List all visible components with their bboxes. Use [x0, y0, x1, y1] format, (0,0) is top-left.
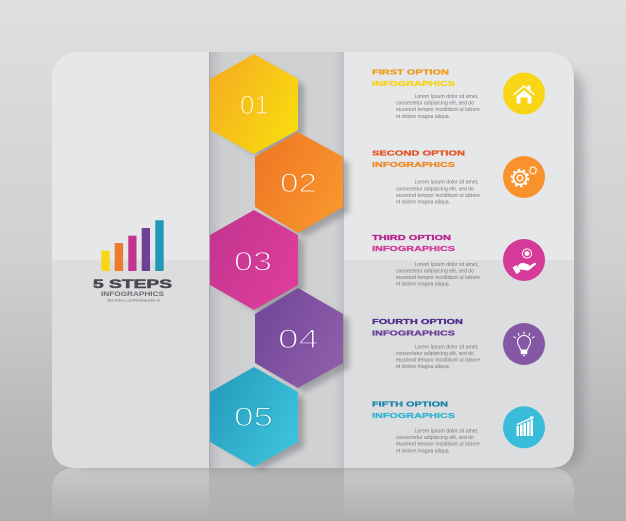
logo: heading: VECTOR ILLUSTRATION EPS 10	[107, 298, 161, 302]
option 3 text: eiusmod tempor incididunt ut labore	[396, 275, 480, 281]
option 3 text: et dolore magna aliqua.	[396, 282, 450, 288]
option 2 text: INFOGRAPHICS	[372, 160, 455, 169]
option 5 text: consectetur adipisicing elit, sed do	[396, 435, 474, 441]
option 3 text: THIRD OPTION	[372, 233, 451, 242]
option 3 text: INFOGRAPHICS	[372, 244, 455, 253]
option 2 text: consectetur adipisicing elit, sed do	[396, 186, 474, 192]
option 2 text	[372, 148, 480, 206]
option 1 text	[372, 68, 480, 120]
logo: heading	[93, 277, 172, 302]
option 3 text: consectetur adipisicing elit, sed do	[396, 268, 474, 274]
option 2 text: et dolore magna aliqua.	[396, 200, 450, 206]
option 4 text: eiusmod tempor incididunt ut labore	[396, 358, 480, 364]
panel: left card and right card	[52, 52, 574, 468]
logo: 5 steps bar chart	[101, 220, 164, 271]
option 4 text: FOURTH OPTION	[372, 317, 463, 326]
icon: growth chart	[503, 406, 545, 448]
option 2 text: Lorem Ipsum dolor sit amet,	[414, 180, 478, 186]
option 1 text: eiusmod tempor incididunt ut labore	[396, 107, 480, 113]
option 5 text: FIFTH OPTION	[372, 400, 448, 408]
hexagon shadows	[222, 62, 349, 470]
hexagon 03	[210, 210, 298, 310]
panel: centre recessed band	[209, 52, 344, 468]
option 4 text	[372, 317, 480, 370]
hexagon 04	[255, 288, 343, 388]
option 4 text: consectetur adipisicing elit, sed do	[396, 351, 474, 357]
logo: heading: 5 STEPS	[93, 277, 172, 291]
option 5 text: et dolore magna aliqua.	[396, 448, 450, 454]
option 1 text: INFOGRAPHICS	[372, 79, 455, 88]
icon: hand with coin	[503, 239, 545, 281]
hexagon 01: 01	[240, 90, 269, 120]
icon: gears	[503, 156, 545, 198]
hexagon 05: 05	[234, 402, 273, 432]
option 2 text: SECOND OPTION	[372, 148, 465, 158]
option 4 text: INFOGRAPHICS	[372, 328, 455, 338]
icon: light bulb	[503, 323, 545, 365]
option 4 text: Lorem Ipsum dolor sit amet,	[414, 344, 478, 350]
option 5 text	[372, 400, 480, 454]
option 1 text: et dolore magna aliqua.	[396, 114, 450, 120]
icon: house	[503, 72, 545, 114]
option 1 text: Lorem Ipsum dolor sit amet,	[414, 94, 478, 100]
option 2 text: eiusmod tempor incididunt ut labore	[396, 193, 480, 199]
card shadow	[66, 68, 584, 468]
hexagon 03: 03	[234, 246, 272, 276]
option 4 text: et dolore magna aliqua.	[396, 364, 450, 370]
option 5 text: INFOGRAPHICS	[372, 411, 455, 420]
option 1 text: consectetur adipisicing elit, sed do	[396, 101, 474, 107]
hexagon 04: 04	[278, 324, 319, 354]
card reflection	[52, 468, 574, 521]
option 5 text: eiusmod tempor incididunt ut labore	[396, 442, 480, 448]
hexagon 02: 02	[280, 168, 317, 198]
hexagon 01	[210, 54, 298, 154]
logo: heading: INFOGRAPHICS	[101, 291, 165, 298]
option 3 text	[372, 233, 480, 288]
option 3 text: Lorem Ipsum dolor sit amet,	[414, 262, 478, 268]
hexagon 02	[255, 132, 343, 233]
hexagon 05	[210, 367, 298, 467]
option 5 text: Lorem Ipsum dolor sit amet,	[414, 428, 478, 434]
option 1 text: FIRST OPTION	[372, 68, 449, 76]
